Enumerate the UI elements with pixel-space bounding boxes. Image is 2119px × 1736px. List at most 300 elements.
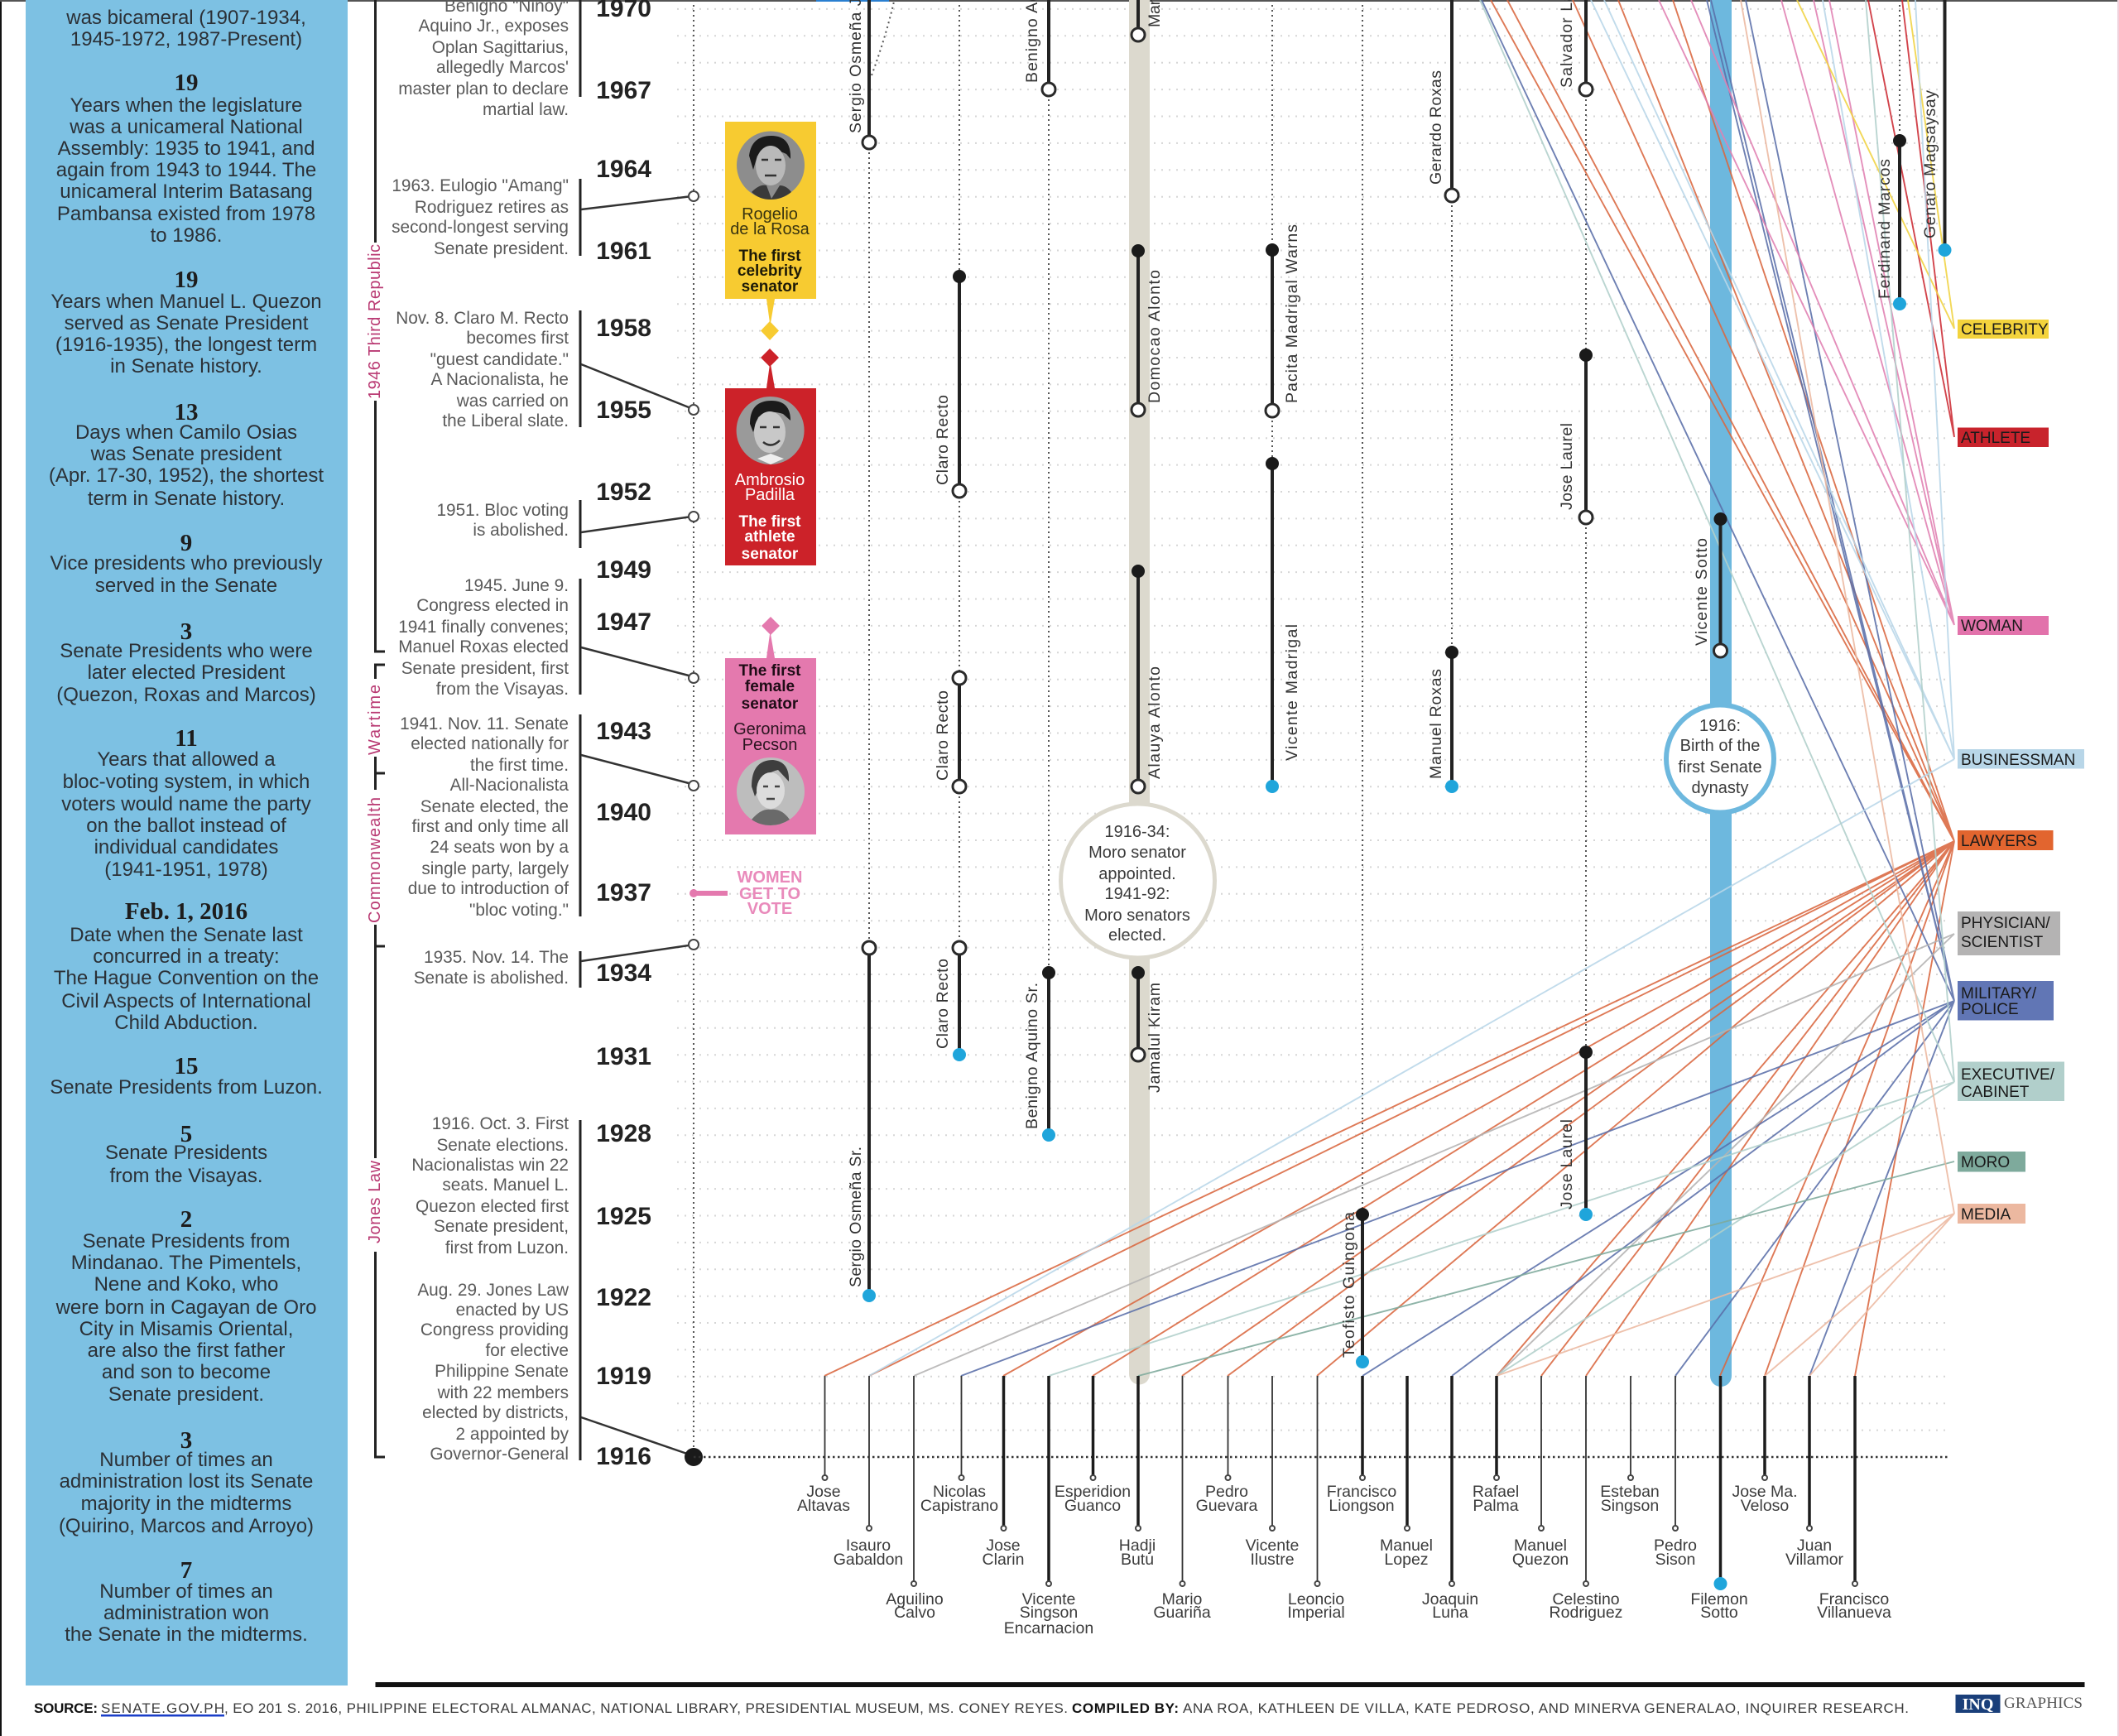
panel: senate facts sidebar: 7 (180, 1557, 192, 1584)
card: first athlete senator: athlete (744, 528, 795, 546)
legend: senator backgrounds (1958, 320, 2084, 1224)
card: first female senator: The first (739, 662, 801, 680)
event annotations: single party, largely (421, 859, 569, 878)
panel: senate facts sidebar: again from 1943 to 1944. The (56, 159, 316, 181)
dotted tenure guides (869, 0, 1900, 1214)
year labels: 1949 (596, 556, 651, 584)
panel: senate facts sidebar: (1916-1935), the longest term (55, 334, 317, 356)
event annotations: Rodriguez retires as (415, 198, 569, 217)
senators: Madrigal family: Pacita Madrigal Warns (1283, 224, 1301, 403)
senator: Ferdinand Marcos: Ferdinand Marcos (1876, 159, 1894, 299)
panel: senate facts sidebar: Senate president. (108, 1383, 264, 1406)
senator: Vicente Sotto: Vicente Sotto (1693, 538, 1711, 646)
panel: senate facts sidebar: majority in the midterms (81, 1493, 291, 1515)
portrait: Geronima Pecson (737, 757, 805, 825)
senator: Teofisto Guingona (1340, 1208, 1369, 1368)
roster names: Villanueva (1817, 1604, 1891, 1622)
roster names: Esperidion (1055, 1483, 1131, 1501)
first Senate roster (797, 1376, 1891, 1637)
year labels: 1925 (596, 1203, 651, 1230)
callout: first Senate dynasty: Birth of the (1680, 737, 1760, 755)
roster names: Manuel (1514, 1536, 1567, 1555)
roster names: Esteban (1600, 1483, 1660, 1501)
year labels: 1947 (596, 608, 651, 636)
panel: senate facts sidebar: Number of times an (99, 1449, 273, 1471)
callout: first Senate dynasty: 1916: (1699, 717, 1741, 735)
roster names: Pedro (1205, 1483, 1248, 1501)
event annotations: allegedly Marcos' (436, 58, 569, 77)
roster names: Aguilino (886, 1590, 944, 1609)
senators: Laurel family: Jose Laurel (1558, 1119, 1576, 1209)
year labels: 1922 (596, 1284, 651, 1311)
roster end markers (823, 1475, 1857, 1590)
roster names: Butu (1121, 1551, 1154, 1569)
panel: senate facts sidebar: were born in Cagayan de Oro (55, 1296, 316, 1319)
year labels: 1955 (596, 397, 651, 424)
tag: lawyers: LAWYERS (1961, 833, 2037, 850)
roster names: Singson (1020, 1604, 1078, 1622)
year labels: 1967 (596, 77, 651, 104)
panel: senate facts sidebar: Days when Camilo Osias (75, 421, 297, 444)
lines: executive and cabinet (1049, 0, 1954, 1376)
panel: senate facts sidebar: served as Senate President (65, 312, 309, 334)
panel: senate facts sidebar: bloc-voting system, in which (63, 771, 310, 793)
roster names: Guariña (1153, 1604, 1211, 1622)
roster names: Altavas (797, 1497, 850, 1515)
event annotations: Quezon elected first (416, 1197, 569, 1216)
event annotations: A Nacionalista, he (431, 370, 569, 389)
event annotations: 1963. Eulogio "Amang" (392, 176, 569, 195)
roster names: Encarnacion (1004, 1619, 1093, 1637)
roster names: Rodriguez (1550, 1604, 1622, 1622)
lines: businessmen (869, 0, 1954, 1376)
lines: military and police (961, 0, 1954, 1376)
panel: senate facts sidebar: 19 (174, 267, 199, 293)
callout: Moro senators (1061, 804, 1215, 958)
roster names: Ilustre (1250, 1551, 1295, 1569)
senators: Laurel family: Jose Laurel (1558, 423, 1576, 510)
senator: Genaro Magsaysay: Genaro Magsaysay (1921, 90, 1939, 238)
Moro senators: Alauya Alonto (1146, 666, 1164, 779)
tag: media (1958, 1204, 2025, 1224)
panel: senate facts sidebar: and son to become (102, 1361, 271, 1383)
event annotations: Aquino Jr., exposes (418, 17, 569, 36)
panel: senate facts sidebar: 15 (174, 1053, 199, 1080)
event annotations: was carried on (456, 392, 569, 411)
card: first female senator: Pecson (742, 736, 797, 754)
event annotations: 1945. June 9. (464, 576, 569, 595)
year labels: 1958 (596, 315, 651, 342)
callout: Moro senators: Moro senator (1088, 844, 1186, 862)
era bracket: political periods: Wartime (366, 685, 384, 755)
roster names: Isauro (846, 1536, 891, 1555)
panel: senate facts sidebar: 13 (174, 399, 199, 426)
panel: senate facts sidebar: 2 (180, 1206, 192, 1233)
panel: senate facts sidebar: Child Abduction. (114, 1012, 258, 1034)
panel: senate facts sidebar: on the ballot instead of (86, 815, 286, 837)
event annotations: Senate president. (434, 239, 569, 258)
roster names: Francisco (1327, 1483, 1396, 1501)
roster names: Jose Ma. (1732, 1483, 1798, 1501)
panel: senate facts sidebar: was bicameral (1907-1934, (65, 7, 306, 29)
era bracket: political periods: Jones Law (366, 1160, 384, 1243)
senators: Roxas family: Gerardo Roxas (1427, 70, 1445, 185)
event annotations: Congress providing (420, 1320, 569, 1339)
tag: Moro (1958, 1152, 2025, 1172)
band: first Senate dynasty (1710, 0, 1732, 1387)
senators: Roxas family: Manuel Roxas (1427, 669, 1445, 779)
year labels: 1928 (596, 1120, 651, 1147)
panel: senate facts sidebar: in Senate history. (110, 355, 262, 377)
source line: SOURCE: (34, 1700, 98, 1716)
callout: first Senate dynasty (1666, 705, 1774, 813)
senator: Claro Recto: Claro Recto (934, 395, 952, 485)
women get to vote marker: WOMEN (738, 868, 802, 887)
tag: woman: WOMAN (1961, 618, 2023, 635)
senator: Ferdinand Marcos (1876, 134, 1906, 310)
roster names: Veloso (1741, 1497, 1789, 1515)
event annotations: Congress elected in (416, 596, 569, 615)
panel: senate facts sidebar: (Quezon, Roxas and Marcos) (56, 684, 316, 706)
timeline axis ticks (579, 0, 581, 1460)
panel: senate facts sidebar: unicameral Interim Batasang (60, 180, 313, 203)
era bracket: political periods (366, 0, 385, 1457)
roster names: Vicente (1246, 1536, 1299, 1555)
card: first female senator: female (745, 678, 795, 695)
panel: senate facts sidebar: City in Misamis Oriental, (79, 1318, 293, 1340)
roster names: Villamor (1785, 1551, 1844, 1569)
panel: senate facts sidebar: Years when the legislature (70, 94, 302, 117)
event annotations: 2 appointed by (456, 1425, 569, 1444)
roster names: Sison (1655, 1551, 1695, 1569)
event annotations: elected nationally for (411, 734, 569, 753)
roster names: Juan (1797, 1536, 1832, 1555)
Moro senators: Domocao Alonto (1146, 270, 1164, 403)
panel: senate facts sidebar: Civil Aspects of International (61, 990, 311, 1012)
women get to vote marker (690, 868, 802, 918)
portrait: Rogelio de la Rosa (737, 131, 805, 200)
callout: first Senate dynasty: first Senate (1678, 758, 1762, 777)
card: first celebrity senator: senator (742, 278, 799, 296)
event annotations: martial law. (483, 100, 569, 119)
event annotations: the first time. (470, 756, 569, 775)
roster names: Vicente (1022, 1590, 1075, 1609)
tag: physician and scientist: PHYSICIAN/ (1961, 915, 2050, 932)
panel: senate facts sidebar (26, 0, 348, 1686)
tag: military and police: POLICE (1961, 1001, 2019, 1018)
roster names: Jose (986, 1536, 1021, 1555)
year labels: 1919 (596, 1363, 651, 1390)
roster names: Palma (1473, 1497, 1519, 1515)
tag: Moro: MORO (1961, 1154, 2010, 1171)
panel: senate facts sidebar: administration won (103, 1602, 269, 1624)
event annotations: enacted by US (456, 1301, 569, 1320)
panel: senate facts sidebar: Vice presidents who previously (50, 552, 323, 575)
year labels (596, 0, 651, 1470)
tag: lawyers (1958, 830, 2053, 850)
roster names: Hadji (1119, 1536, 1156, 1555)
senator: Teofisto Guingona: Teofisto Guingona (1340, 1212, 1358, 1358)
source line: ANA ROA, KATHLEEN DE VILLA, KATE PEDROSO, AND MINERVA GENERALAO, INQUIRER RESEARCH. (1183, 1700, 1909, 1716)
event annotations: 24 seats won by a (430, 838, 569, 857)
event annotations: due to introduction of (408, 879, 569, 898)
card: first athlete senator: senator (742, 546, 799, 563)
panel: senate facts sidebar: 11 (175, 725, 198, 752)
event annotations: master plan to declare (398, 79, 569, 99)
tag: executive and cabinet: EXECUTIVE/ (1961, 1066, 2055, 1084)
roster names: Clarin (983, 1551, 1024, 1569)
roster names: Nicolas (933, 1483, 986, 1501)
panel: senate facts sidebar: was Senate president (90, 443, 282, 465)
callout: Moro senators: appointed. (1098, 865, 1176, 883)
event annotations: Senate elections. (436, 1136, 569, 1155)
roster names: Guevara (1196, 1497, 1258, 1515)
roster names: Imperial (1287, 1604, 1345, 1622)
senators: Laurel family (1558, 0, 1593, 1221)
roster names: Quezon (1512, 1551, 1569, 1569)
panel: senate facts sidebar: Senate Presidents who were (60, 640, 313, 662)
callout: Moro senators: Moro senators (1084, 906, 1190, 925)
event annotations: Governor-General (430, 1445, 569, 1464)
panel: senate facts sidebar: was a unicameral National (69, 116, 303, 138)
event timeline with connectors (581, 0, 703, 1466)
panel: senate facts sidebar: Mindanao. The Pimentels, (71, 1252, 301, 1274)
senators: Madrigal family (1266, 224, 1301, 793)
lines: celebrities (1797, 0, 1954, 329)
panel: senate facts sidebar: 3 (180, 1427, 192, 1454)
roster names: Mario (1162, 1590, 1203, 1609)
panel: senate facts sidebar: to 1986. (151, 224, 222, 247)
tag: executive and cabinet (1958, 1061, 2064, 1101)
roster names: Joaquin (1422, 1590, 1478, 1609)
event annotations: elected by districts, (422, 1403, 569, 1422)
tag: athlete (1958, 427, 2049, 447)
event annotations: 1951. Bloc voting (436, 501, 569, 520)
panel: senate facts sidebar: voters would name the party (61, 793, 311, 815)
panel: senate facts sidebar: concurred in a treaty: (93, 945, 280, 968)
card: first athlete senator: The first (739, 513, 801, 531)
event annotations: "guest candidate." (430, 350, 569, 369)
logo: INQ Graphics (1955, 1695, 2083, 1714)
roster names: Manuel (1380, 1536, 1433, 1555)
event annotations: Senate elected, the (420, 797, 569, 816)
roster names: Sotto (1700, 1604, 1738, 1622)
senator: Claro Recto: Claro Recto (934, 959, 952, 1049)
senator: Sergio Osmeña (847, 0, 876, 1302)
event annotations: the Liberal slate. (442, 411, 569, 430)
event annotations (392, 0, 569, 1464)
roster names: Lopez (1384, 1551, 1429, 1569)
roster names: Capistrano (920, 1497, 998, 1515)
year labels: 1961 (596, 238, 651, 265)
panel: senate facts sidebar: (Apr. 17-30, 1952), the shortest (49, 464, 324, 487)
senator: Vicente Sotto (1693, 512, 1727, 657)
panel: senate facts sidebar: individual candidates (94, 836, 278, 858)
event annotations: from the Visayas. (436, 680, 569, 699)
card: first celebrity senator: The first (739, 248, 801, 265)
card: first celebrity senator: celebrity (738, 262, 803, 280)
footer rule (376, 1682, 2084, 1687)
lines: Moro (1138, 1161, 1954, 1376)
roster lines (824, 1376, 1675, 1584)
lines: physician and scientist (914, 934, 1954, 1376)
source line: SENATE.GOV.PH (101, 1700, 224, 1716)
band: Moro senators (1129, 0, 1150, 1384)
panel: senate facts sidebar: are also the first father (88, 1339, 285, 1362)
roster names: Pedro (1654, 1536, 1697, 1555)
event annotations: Philippine Senate (435, 1362, 569, 1381)
event annotations: Manuel Roxas elected (398, 637, 569, 656)
year labels: 1934 (596, 959, 651, 987)
year labels: 1943 (596, 718, 651, 745)
senator: Claro Recto: Claro Recto (934, 690, 952, 781)
event annotations: Senate is abolished. (414, 969, 569, 988)
event annotations: "bloc voting." (469, 901, 569, 920)
event annotations: 1935. Nov. 14. The (424, 948, 569, 967)
callout: Moro senators: elected. (1108, 926, 1166, 945)
senator: Genaro Magsaysay (1921, 0, 1952, 257)
tag: military and police: MILITARY/ (1961, 985, 2037, 1003)
panel: senate facts sidebar: The Hague Convention on the (54, 967, 319, 989)
card: first athlete senator (725, 349, 816, 565)
card: first female senator: Geronima (733, 720, 807, 738)
roster names: Liongson (1329, 1497, 1395, 1515)
panel: senate facts sidebar: later elected President (88, 661, 286, 684)
year labels: 1964 (596, 156, 651, 183)
Moro senators: Jamalul Kiram (1146, 983, 1164, 1093)
event annotations: Oplan Sagittarius, (432, 38, 569, 57)
panel: senate facts sidebar: administration lost its Senate (60, 1470, 313, 1493)
lines: athletes (1868, 0, 1954, 437)
lines: women (1659, 0, 1954, 625)
event annotations: Senate president, first (401, 659, 569, 678)
event annotations: becomes first (466, 329, 569, 348)
category connector lines (824, 0, 1954, 1376)
card: first celebrity senator: Rogelio (742, 205, 798, 224)
panel: senate facts sidebar: the Senate in the midterms. (65, 1623, 308, 1646)
roster names: Jose (806, 1483, 841, 1501)
logo: INQ Graphics: GRAPHICS (2004, 1695, 2083, 1712)
tag: woman (1958, 616, 2049, 635)
source line: COMPILED BY: (1072, 1700, 1179, 1716)
panel: senate facts sidebar: 3 (180, 618, 192, 645)
event annotations: Aug. 29. Jones Law (417, 1281, 569, 1300)
roster names: Singson (1601, 1497, 1659, 1515)
panel: senate facts sidebar: Senate Presidents (105, 1142, 267, 1164)
year labels: 1937 (596, 879, 651, 906)
panel: senate facts sidebar: (Quirino, Marcos and Arroyo) (59, 1515, 314, 1537)
panel: senate facts sidebar: Years when Manuel L. Quezon (50, 291, 322, 313)
panel: senate facts sidebar: 1945-1972, 1987-Present) (70, 28, 302, 50)
panel: senate facts sidebar: 19 (174, 70, 199, 96)
roster names: Celestino (1552, 1590, 1620, 1609)
panel: senate facts sidebar: (1941-1951, 1978) (104, 858, 268, 881)
event annotations: All-Nacionalista (450, 776, 569, 795)
panel: senate facts sidebar: from the Visayas. (110, 1165, 262, 1187)
tag: military and police (1958, 981, 2054, 1020)
roster names: Filemon (1690, 1590, 1748, 1609)
panel: senate facts sidebar: Senate Presidents from (83, 1230, 290, 1253)
roster names: Francisco (1819, 1590, 1889, 1609)
roster names: Calvo (894, 1604, 935, 1622)
panel: senate facts sidebar: Date when the Senate last (70, 924, 303, 946)
panel: senate facts sidebar: Senate Presidents from Luzon. (50, 1076, 323, 1099)
event annotations: 1941. Nov. 11. Senate (400, 714, 569, 733)
panel: senate facts sidebar: 5 (180, 1121, 192, 1147)
roster names: Guanco (1064, 1497, 1121, 1515)
year labels: 1931 (596, 1043, 651, 1070)
card: first athlete senator: Padilla (745, 486, 795, 504)
source line: , EO 201 S. 2016, PHILIPPINE ELECTORAL ALMANAC, NATIONAL LIBRARY, PRESIDENTIAL MUSEUM, MS. CONEY REYES. (224, 1700, 1068, 1716)
panel: senate facts sidebar: Nene and Koko, who (94, 1273, 278, 1296)
event annotations: Nacionalistas win 22 (411, 1156, 569, 1175)
event annotations: for elective (485, 1341, 569, 1360)
senator: Claro Recto (934, 270, 966, 1061)
card: first athlete senator: Ambrosio (735, 471, 805, 489)
event annotations: is abolished. (473, 521, 569, 540)
card: first celebrity senator (725, 122, 816, 340)
horizontal year grid (677, 9, 1948, 1431)
senator: Benigno Aquino: Benigno Aquino Sr. (1023, 983, 1041, 1129)
roster names: Rafael (1473, 1483, 1519, 1501)
women get to vote marker: GET TO (739, 885, 800, 903)
baseline: 1916 dotted rule (694, 1456, 1948, 1458)
source line (34, 1700, 1909, 1717)
tag: athlete: ATHLETE (1961, 430, 2030, 447)
panel: senate facts sidebar: Years that allowed a (97, 748, 276, 771)
lines: lawyers (824, 0, 1954, 1376)
panel: senate facts sidebar: Pambansa existed from 1978 (57, 203, 315, 225)
tag: physician and scientist (1958, 911, 2060, 955)
event annotations: 1916. Oct. 3. First (432, 1114, 569, 1133)
event annotations: Senate president, (434, 1217, 569, 1236)
year labels: 1940 (596, 799, 651, 826)
senator: Benigno Aquino (1023, 0, 1055, 1142)
tag: media: MEDIA (1961, 1206, 2011, 1224)
event annotations: first and only time all (411, 817, 569, 836)
panel: senate facts sidebar: served in the Senate (95, 575, 277, 597)
tag: executive and cabinet: CABINET (1961, 1084, 2030, 1101)
card: first female senator (725, 617, 816, 834)
year labels: 1916 (596, 1443, 651, 1470)
roster names: Gabaldon (834, 1551, 903, 1569)
callout: first Senate dynasty: dynasty (1692, 779, 1748, 797)
portrait: Ambrosio Padilla (737, 397, 805, 464)
panel: senate facts sidebar: 9 (180, 530, 192, 556)
event annotations: Nov. 8. Claro M. Recto (396, 309, 569, 328)
card: first celebrity senator: de la Rosa (730, 220, 810, 238)
senator: Sergio Osmeña: Sergio Osmeña Sr. (847, 1147, 865, 1287)
roster names: Luna (1432, 1604, 1468, 1622)
senators: Madrigal family: Vicente Madrigal (1283, 624, 1301, 761)
event annotations: first from Luzon. (445, 1238, 569, 1258)
era bracket: political periods: Commonwealth (366, 797, 384, 923)
event annotations: seats. Manuel L. (442, 1176, 569, 1195)
logo: INQ Graphics: INQ (1963, 1695, 1993, 1714)
roster names: Leoncio (1288, 1590, 1344, 1609)
callout: Moro senators: 1916-34: (1105, 823, 1170, 841)
panel: senate facts sidebar: term in Senate history. (88, 488, 285, 510)
event annotations: 1941 finally convenes; (398, 618, 569, 637)
women get to vote marker: VOTE (747, 900, 792, 918)
event annotations: with 22 members (437, 1383, 569, 1402)
tag: businessman: BUSINESSMAN (1961, 752, 2075, 769)
panel: senate facts sidebar: Number of times an (99, 1580, 273, 1603)
year labels: 1952 (596, 478, 651, 506)
event annotations: second-longest serving (392, 218, 569, 237)
callout: Moro senators: 1941-92: (1105, 885, 1170, 903)
tag: physician and scientist: SCIENTIST (1961, 934, 2044, 951)
